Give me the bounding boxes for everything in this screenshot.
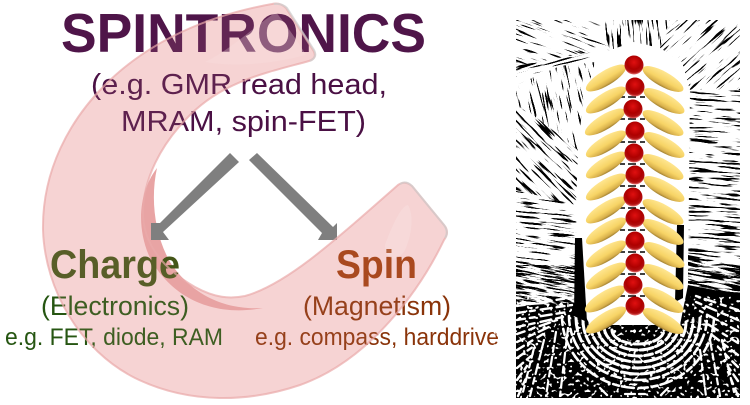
arrow: to charge — [151, 153, 239, 240]
arrow: to spin — [249, 153, 337, 240]
spintronics examples: (e.g. GMR read head, — [91, 69, 387, 101]
charge examples: e.g. FET, diode, RAM — [5, 324, 223, 351]
filings: streak regions — [516, 20, 740, 305]
filings: marks behind the chain — [620, 97, 650, 296]
filings: dark bands beside and under the chain — [574, 225, 684, 322]
spin subtitle: (Magnetism) — [303, 291, 451, 321]
spintronics examples — [91, 69, 387, 138]
title: SPINTRONICS — [61, 2, 426, 64]
magnet base fill — [43, 4, 447, 398]
spin examples: e.g. compass, harddrive — [255, 324, 499, 351]
chain: red spheres — [624, 56, 644, 316]
charge heading: Charge — [50, 243, 180, 287]
spintronics examples: MRAM, spin-FET) — [121, 106, 366, 138]
charge subtitle: (Electronics) — [41, 291, 189, 321]
magnet translucent overlay with highlights — [43, 4, 447, 398]
chain: left ellipsoids — [581, 60, 630, 338]
filings: dense lower field with white arcs — [516, 285, 740, 398]
spin heading: Spin — [336, 243, 417, 287]
panel: iron filings field micrograph — [494, 20, 740, 398]
chain: right ellipsoids — [639, 61, 688, 339]
